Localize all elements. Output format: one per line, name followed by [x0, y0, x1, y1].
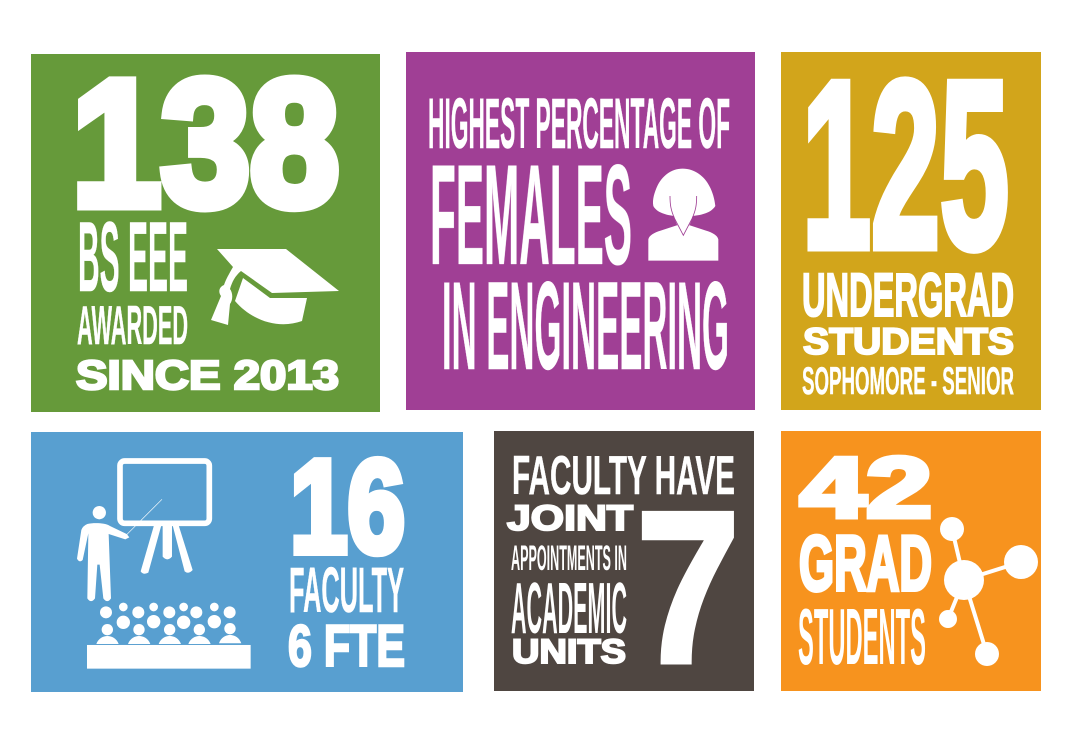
- panel: faculty: [31, 432, 463, 692]
- label: students: STUDENTS: [803, 321, 1014, 362]
- stat: 42: 42: [800, 441, 932, 536]
- panel: faculty: FACULTY: [289, 554, 404, 626]
- icon: easel legs: [141, 525, 193, 574]
- panel: joint appointments: ACADEMIC: [511, 569, 627, 649]
- icon: woman: [648, 169, 718, 261]
- panel: females in engineering: [406, 52, 755, 410]
- stat: 138: 138: [72, 43, 339, 243]
- panel: undergrad students: [781, 33, 1041, 410]
- panel: bachelor degrees: AWARDED: [77, 294, 188, 356]
- icon: teacher at board with audience: [77, 461, 251, 669]
- icon: teacher: [77, 506, 129, 601]
- label: since 2013: SINCE 2013: [76, 352, 339, 398]
- label: 6 FTE: 6 FTE: [288, 614, 405, 679]
- label: joint: JOINT: [507, 499, 633, 538]
- panel: joint appointments: [494, 431, 754, 708]
- label: grad: GRAD: [799, 519, 932, 607]
- icon: board: [120, 461, 209, 523]
- icon: graduation cap: [211, 249, 339, 325]
- icon: audience: [87, 603, 251, 669]
- panel: bachelor degrees: [31, 43, 380, 412]
- panel: grad students: [781, 431, 1041, 691]
- panel: joint appointments: APPOINTMENTS IN: [511, 539, 627, 578]
- stat: 16: 16: [290, 433, 405, 580]
- stat: 7: 7: [636, 466, 740, 708]
- label: units: UNITS: [512, 633, 626, 671]
- panel: bachelor degrees: BS EEE: [78, 201, 188, 312]
- icon: molecule: [939, 517, 1038, 666]
- heading: faculty have: FACULTY HAVE: [512, 444, 735, 506]
